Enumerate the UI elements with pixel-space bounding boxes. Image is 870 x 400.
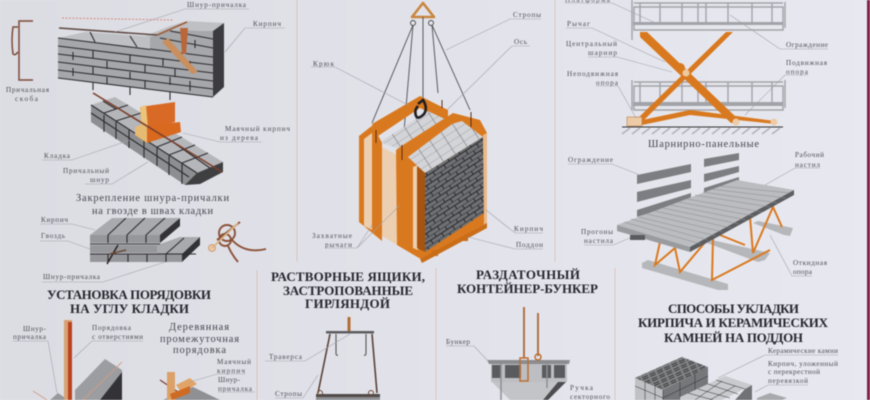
label: Ограждение: Ограждение	[786, 41, 828, 49]
brick courses with nail	[90, 218, 200, 264]
label: Гвоздь	[40, 232, 90, 249]
heading: СПОСОБЫ УКЛАДКИ	[668, 301, 799, 316]
label: Причальный шнур: шнур	[90, 176, 109, 184]
label: Откидная опора: Откидная	[793, 259, 828, 267]
poster right edge	[867, 0, 870, 400]
heading: ГИРЛЯНДОЙ	[305, 296, 390, 311]
label: Керамические камни: Керамические камни	[768, 347, 838, 355]
label: Подвижная опора: опора	[786, 68, 809, 76]
heading: РАЗДАТОЧНЫЙ	[476, 267, 580, 282]
panel: brick package on pallet	[311, 3, 543, 263]
icon: lifting triangle and slings	[372, 3, 470, 143]
label: Стропы	[446, 11, 541, 50]
panel: scissor scaffold	[565, 0, 828, 134]
label: Рычаг: Рычаг	[567, 20, 590, 28]
label: Кирпич, уложенный с перекрестной перевязкой: Кирпич, уложенный	[768, 360, 838, 368]
heading	[457, 267, 598, 296]
label: Кирпич: Кирпич	[41, 216, 68, 224]
corner masonry with profile	[33, 320, 122, 400]
subheading: wooden intermediate profile: промежуточная	[160, 334, 239, 345]
subheading: fastening on nail: на гвозде в швах кладки	[92, 206, 213, 217]
label: Ось	[447, 38, 530, 110]
label: Неподвижная опора	[567, 70, 636, 118]
heading: КИРПИЧА И КЕРАМИЧЕСКИХ	[638, 315, 829, 330]
label: Стропы: Стропы	[513, 11, 541, 19]
label: Кирпич, уложенный с перекрестной перевязкой	[755, 360, 838, 392]
label: Прогоны настила	[581, 228, 630, 245]
label: Бункер: Бункер	[446, 338, 470, 346]
subheading: hinged panel: Шарнирно-панельные	[648, 139, 759, 150]
label: Кладка: Кладка	[44, 152, 71, 160]
label: Захватные рычаги: рычаги	[325, 241, 352, 249]
panel: mooring cord on masonry	[6, 1, 290, 185]
label: Центральный шарнир: Центральный	[566, 40, 617, 48]
label: Причальная скоба: скоба	[15, 95, 39, 103]
label: Ограждение: Ограждение	[568, 156, 613, 164]
label: Ось: Ось	[514, 38, 528, 46]
label: Причальный шнур: Причальный	[63, 167, 109, 175]
subheading: wooden intermediate profile: порядовка	[173, 345, 226, 356]
panel: mortar boxes	[265, 269, 425, 400]
ceramic blocks stack	[635, 357, 708, 400]
panel: cord fastening on nail	[40, 193, 266, 282]
label: Керамические камни	[718, 347, 838, 378]
label: Маячный кирпич: кирпич	[217, 367, 245, 375]
label: Подвижная опора	[745, 59, 828, 115]
label: Шнур-причалка: Шнур-причалка	[43, 273, 101, 281]
heading	[271, 269, 425, 311]
label: Крюк	[311, 60, 408, 105]
label: Шнур-причалка	[13, 325, 57, 393]
wooden profile with beacon brick	[160, 372, 220, 400]
label: Порядовка с отверстиями: Порядовка	[92, 324, 132, 332]
label: Шнур-причалка: Шнур-	[23, 325, 47, 333]
panel: hinged panel scaffold	[568, 139, 828, 290]
label: Ограждение	[568, 156, 640, 175]
label: Гвоздь: Гвоздь	[41, 232, 66, 240]
heading: НА УГЛУ КЛАДКИ	[70, 301, 189, 316]
subheading: fastening on nail	[76, 193, 229, 217]
label: Ручка секторного: Ручка	[570, 384, 594, 392]
label: Поддон: Поддон	[516, 241, 543, 249]
third stack	[757, 393, 787, 400]
label: Траверса	[265, 334, 350, 361]
label: Поддон	[468, 237, 543, 249]
label: Стропы	[275, 375, 318, 398]
panel: corner profile installation	[13, 287, 255, 400]
label: Кирпич: Кирпич	[514, 225, 543, 233]
wall with cord	[58, 18, 224, 100]
label: Кирпич: Кирпич	[253, 20, 281, 28]
label: Захватные рычаги	[312, 205, 400, 249]
label: Бункер	[446, 338, 488, 361]
label: Шнур-причалка	[115, 1, 249, 32]
brick package with grips	[359, 96, 487, 263]
label: Причальный шнур	[63, 162, 148, 184]
label: Шнур-причалка: Шнур-	[218, 376, 241, 384]
label: Прогоны настила: настила	[584, 237, 614, 245]
heading	[638, 301, 829, 345]
label: Кирпич, уложенный с перекрестной перевязкой: перевязкой	[768, 377, 808, 385]
label: Прогоны настила: Прогоны	[581, 228, 613, 236]
label: Рычаг	[566, 20, 665, 62]
label: Траверса: Траверса	[269, 353, 303, 361]
hinged panel scaffold drawing	[617, 153, 794, 290]
label: Маячный кирпич из дерева: из дерева	[220, 134, 259, 142]
label: Кирпич, уложенный с перекрестной перевязкой: с перекрестной	[768, 368, 820, 376]
label: Центральный шарнир: шарнир	[588, 49, 617, 57]
label: Маячный кирпич из дерева	[183, 125, 290, 142]
label: Причальная скоба	[6, 86, 50, 103]
label: Крюк: Крюк	[313, 60, 334, 68]
label: Неподвижная опора: Неподвижная	[567, 70, 619, 78]
label: Откидная опора	[770, 235, 828, 276]
brick cross-bonded stack	[680, 376, 752, 400]
panel: container hopper	[446, 267, 610, 400]
label: Кирпич	[225, 20, 285, 52]
label: Кирпич	[40, 216, 95, 230]
label: Рабочий настил: Рабочий	[795, 151, 824, 159]
label: Причальная скоба: Причальная	[6, 86, 50, 94]
label: Маячный кирпич из дерева: Маячный кирпич	[225, 125, 290, 133]
heading: РАСТВОРНЫЕ ЯЩИКИ,	[271, 269, 425, 284]
label: Шнур-причалка: Шнур-причалка	[187, 1, 247, 9]
label: Кладка	[42, 140, 130, 160]
label: Подвижная опора: Подвижная	[786, 59, 828, 67]
label: Рабочий настил	[765, 151, 824, 185]
heading: КАМНЕЙ НА ПОДДОН	[664, 330, 803, 345]
heading: КОНТЕЙНЕР-БУНКЕР	[457, 281, 598, 296]
hopper with chains	[487, 307, 570, 400]
icon: knot on nail	[208, 222, 266, 262]
scissor scaffold drawing	[622, 0, 785, 134]
label: Захватные рычаги: Захватные	[312, 232, 352, 240]
subheading: wooden intermediate profile	[160, 322, 239, 356]
label: Платформа	[565, 0, 660, 25]
label: Ручка секторного	[570, 384, 610, 400]
subheading: fastening on nail: Закрепление шнура-причалки	[76, 193, 229, 204]
wooden beacon brick on masonry	[91, 93, 223, 185]
label: Ограждение	[730, 15, 828, 49]
label: Шнур-причалка: причалка	[13, 333, 47, 341]
heading: УСТАНОВКА ПОРЯДОВКИ	[47, 287, 211, 302]
label: Центральный шарнир	[566, 40, 672, 72]
label: Шнур-причалка	[42, 262, 165, 282]
heading: ЗАСТРОПОВАННЫЕ	[283, 283, 413, 298]
label: Рабочий настил: настил	[795, 161, 820, 169]
label: Маячный кирпич	[190, 358, 251, 382]
label: Стропы: Стропы	[275, 390, 302, 398]
label: Шнур-причалка	[218, 376, 255, 393]
label: Порядовка с отверстиями	[74, 324, 143, 358]
panel: stacking methods on pallet	[635, 301, 838, 400]
heading	[47, 287, 211, 316]
label: Шнур-причалка: причалка	[218, 385, 253, 393]
label: Откидная опора: опора	[793, 268, 813, 276]
icon: mooring bracket	[12, 21, 33, 80]
label: Кирпич	[486, 210, 543, 233]
traverse with slings	[316, 317, 380, 400]
label: Маячный кирпич: Маячный	[217, 358, 251, 366]
subheading: wooden intermediate profile: Деревянная	[169, 322, 229, 333]
label: Неподвижная опора: опора	[596, 79, 619, 87]
label: Порядовка с отверстиями: с отверстиями	[92, 333, 143, 341]
